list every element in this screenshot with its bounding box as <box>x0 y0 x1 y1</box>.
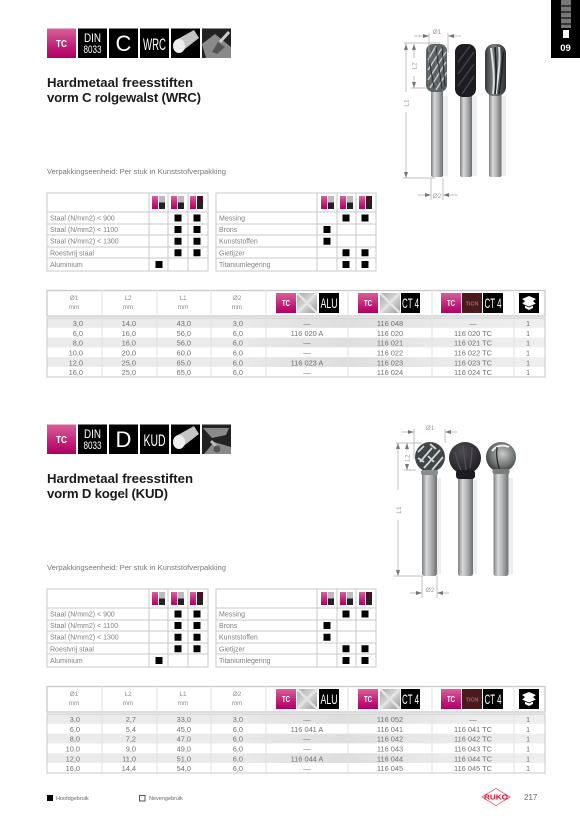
table rows: 6,0 <box>233 764 243 773</box>
column headers: mm <box>123 304 133 311</box>
table rows: 65,0 <box>177 358 191 367</box>
table rows: 16,0 <box>122 339 136 348</box>
section 1 tool photo with dimensions: L1 <box>404 99 410 107</box>
table rows: 116 045 <box>377 764 403 773</box>
section 2 icon row: 8033 <box>84 440 102 452</box>
table rows: — <box>303 735 311 744</box>
table rows: 3,0 <box>233 715 243 724</box>
section 2 icon row: KUD <box>144 431 166 450</box>
table rows: 56,0 <box>177 339 191 348</box>
table rows: 11,0 <box>122 754 136 763</box>
RUKO logo <box>482 788 510 806</box>
column headers: Ø2 <box>233 295 242 302</box>
table rows: 116 043 TC <box>454 745 493 754</box>
table rows: 116 023 TC <box>454 358 493 367</box>
table rows: — <box>303 339 311 348</box>
section 2 icon row: D <box>116 427 131 452</box>
table rows: 60,0 <box>177 349 191 358</box>
table rows: 25,0 <box>122 358 136 367</box>
table rows: 20,0 <box>122 349 136 358</box>
table rows: 116 024 TC <box>454 368 493 377</box>
table rows: 116 048 <box>377 319 403 328</box>
section 2 tool photo with dimensions: L1 <box>396 506 403 514</box>
table rows: 6,0 <box>233 349 243 358</box>
section 1 icon row: C <box>116 31 132 56</box>
table rows: 1 <box>526 319 530 328</box>
section 2 material table right: Kunststoffen <box>219 635 258 642</box>
section 1 icon row: DIN <box>84 31 101 45</box>
table rows: 6,0 <box>73 329 83 338</box>
table rows: 43,0 <box>177 319 191 328</box>
table rows: 65,0 <box>177 368 191 377</box>
table rows: 116 021 <box>377 339 403 348</box>
coating icons: TC <box>282 299 290 308</box>
coating icons: TC <box>447 695 455 704</box>
section 1 material table left: Aluminium <box>50 262 83 269</box>
table rows: 6,0 <box>233 358 243 367</box>
coating icons <box>276 689 503 709</box>
table rows: 1 <box>526 358 530 367</box>
table rows: 6,0 <box>233 745 243 754</box>
table rows: 49,0 <box>177 745 191 754</box>
section 1 icon row: 8033 <box>84 44 102 56</box>
table rows: 12,0 <box>66 754 80 763</box>
section 1 material table right: Brons <box>219 227 238 234</box>
column headers: Ø1 <box>70 295 79 302</box>
section 1 icon row <box>47 28 231 58</box>
material column icons right <box>321 592 372 605</box>
table rows: 47,0 <box>177 735 191 744</box>
coating icons <box>276 293 503 313</box>
table rows: 1 <box>526 764 530 773</box>
coating icons: TiCN <box>466 302 478 308</box>
table rows: 1 <box>526 735 530 744</box>
table rows: 116 042 TC <box>454 735 493 744</box>
table rows: 116 041 A <box>291 725 323 734</box>
section 1 title: vorm C rolgewalst (WRC) <box>47 90 201 105</box>
column headers: Ø2 <box>233 691 242 698</box>
column headers: mm <box>178 700 188 707</box>
table rows: 6,0 <box>70 725 80 734</box>
legend: Hoofdgebruik <box>56 796 89 802</box>
section 2 title: vorm D kogel (KUD) <box>47 486 168 501</box>
coating icons: TC <box>282 695 290 704</box>
column headers: mm <box>232 700 242 707</box>
legend: Nevengebruik <box>149 796 183 802</box>
table rows: 116 022 TC <box>454 349 493 358</box>
section 2 material table left: Aluminium <box>50 658 83 665</box>
material column icons <box>152 592 203 605</box>
table rows: 8,0 <box>73 339 83 348</box>
table rows <box>69 319 530 377</box>
column headers: L1 <box>179 295 187 302</box>
table rows: 116 020 A <box>291 329 323 338</box>
table rows: — <box>303 319 311 328</box>
table rows: 116 020 <box>377 329 403 338</box>
section 1 material table left: Staal (N/mm2) < 900 <box>50 216 115 222</box>
icon: package <box>519 689 539 709</box>
coating icons: CT 4 <box>402 691 419 707</box>
section 2 material table right: Messing <box>219 612 245 618</box>
table rows: 54,0 <box>177 764 191 773</box>
section 2 icon row: DIN <box>84 427 101 441</box>
table rows: 1 <box>526 754 530 763</box>
table rows: 33,0 <box>177 715 191 724</box>
table rows: 116 041 <box>377 725 403 734</box>
coating icons: CT 4 <box>402 295 419 311</box>
table rows: 116 044 TC <box>454 754 493 763</box>
table rows: 45,0 <box>177 725 191 734</box>
section 1 material table right: Kunststoffen <box>219 239 258 246</box>
table rows: 51,0 <box>177 754 191 763</box>
section 1 material table left: Roestvrij staal <box>50 250 94 257</box>
section 1 material table right <box>216 193 376 271</box>
section 1 title <box>47 75 201 105</box>
section 2 title: Hardmetaal freesstiften <box>47 471 193 486</box>
table rows: 116 041 TC <box>454 725 493 734</box>
material column icons <box>152 196 203 209</box>
table rows: 10,0 <box>66 745 80 754</box>
table rows: 7,2 <box>126 735 136 744</box>
table rows: 3,0 <box>73 319 83 328</box>
section 1 tool photo with dimensions: Ø1 <box>433 29 442 36</box>
section 2 material table left: Staal (N/mm2) < 1100 <box>50 623 118 630</box>
section 2 tool photo with dimensions: Ø1 <box>426 425 435 432</box>
table rows: 3,0 <box>70 715 80 724</box>
column headers <box>69 691 242 707</box>
section 1 material table left <box>47 193 208 271</box>
section 1 material table right: Messing <box>219 216 245 222</box>
section 1 tool photo with dimensions: L2 <box>412 62 418 70</box>
table rows: 6,0 <box>233 735 243 744</box>
table rows: 116 024 <box>377 368 403 377</box>
table rows: 1 <box>526 725 530 734</box>
section 1 material table left: Staal (N/mm2) < 1300 <box>50 239 119 246</box>
table rows: — <box>303 745 311 754</box>
coating icons: CT 4 <box>484 691 502 707</box>
section 1 icon row: WRC <box>143 35 166 54</box>
column headers: mm <box>178 304 188 311</box>
chapter tab 09 <box>551 0 580 58</box>
section 2 icon row <box>47 424 231 454</box>
table rows: 14,4 <box>122 764 136 773</box>
section 2 packaging note: Verpakkingseenheid: Per stuk in Kunststofverpakking <box>47 563 226 572</box>
table rows: — <box>303 349 311 358</box>
section 2 material table left: Roestvrij staal <box>50 646 94 653</box>
table rows: 10,0 <box>69 349 83 358</box>
table rows: 1 <box>526 329 530 338</box>
section 2 material table right: Brons <box>219 623 238 630</box>
coating icons: TC <box>364 299 372 308</box>
section 2 article table <box>47 686 545 773</box>
table rows: 16,0 <box>66 764 80 773</box>
coating icons: TC <box>447 299 455 308</box>
chapter tab 09: 09 <box>560 43 571 54</box>
section 2 material table right <box>216 589 376 667</box>
table rows <box>66 715 530 773</box>
table rows: 1 <box>526 349 530 358</box>
table rows: 14,0 <box>122 319 136 328</box>
section 2 material table right: Gietijzer <box>219 646 245 653</box>
table rows: 16,0 <box>122 329 136 338</box>
section 1 material table right: Gietijzer <box>219 250 245 257</box>
table rows: — <box>303 715 311 724</box>
table rows: 6,0 <box>233 725 243 734</box>
table rows: 116 045 TC <box>454 764 493 773</box>
column headers: mm <box>69 700 79 707</box>
RUKO logo: RUKO <box>484 792 508 802</box>
table rows: — <box>469 319 477 328</box>
table rows: 6,0 <box>233 368 243 377</box>
page number: 217 <box>524 793 538 802</box>
section 2 tool photo with dimensions: L2 <box>404 454 412 462</box>
column headers: Ø1 <box>70 691 79 698</box>
icon: package <box>519 293 539 313</box>
coating icons: ALU <box>320 295 338 311</box>
table rows: 1 <box>526 368 530 377</box>
section 2 material table left: Staal (N/mm2) < 1300 <box>50 635 119 642</box>
section 2 icon row: TC <box>56 435 67 446</box>
table rows: 6,0 <box>233 754 243 763</box>
section 2 tool photo with dimensions: Ø2 <box>426 587 435 594</box>
table rows: 116 023 <box>377 358 403 367</box>
table rows: 6,0 <box>233 339 243 348</box>
table rows: 116 023 A <box>291 358 323 367</box>
table rows: — <box>469 715 477 724</box>
section 1 tool photo with dimensions <box>403 29 506 200</box>
material column icons right <box>321 196 372 209</box>
coating icons: ALU <box>320 691 338 707</box>
column headers: L2 <box>124 295 132 302</box>
coating icons: TC <box>364 695 372 704</box>
section 1 packaging note: Verpakkingseenheid: Per stuk in Kunststofverpakking <box>47 167 226 176</box>
column headers <box>69 295 242 311</box>
table rows: — <box>303 368 311 377</box>
table rows: 9,0 <box>126 745 136 754</box>
table rows: 116 044 A <box>291 754 323 763</box>
table rows: 6,0 <box>233 329 243 338</box>
table rows: 16,0 <box>69 368 83 377</box>
section 1 material table left: Staal (N/mm2) < 1100 <box>50 227 118 234</box>
table rows: 116 022 <box>377 349 403 358</box>
section 2 material table left: Staal (N/mm2) < 900 <box>50 612 115 618</box>
column headers: L2 <box>124 691 132 698</box>
table rows: 2,7 <box>126 715 136 724</box>
table rows: 116 021 TC <box>454 339 493 348</box>
section 2 title <box>47 471 193 501</box>
section 2 material table left <box>47 589 208 667</box>
section 2 tool photo with dimensions <box>394 425 516 598</box>
section 1 material table right: Titaniumlegering <box>219 262 271 269</box>
coating icons: TiCN <box>466 698 478 704</box>
column headers: mm <box>232 304 242 311</box>
table rows: 3,0 <box>233 319 243 328</box>
section 1 tool photo with dimensions: Ø2 <box>433 193 442 200</box>
column headers: L1 <box>179 691 187 698</box>
section 1 article table <box>47 290 545 377</box>
coating icons: CT 4 <box>484 295 502 311</box>
section 2 material table right: Titaniumlegering <box>219 658 271 665</box>
table rows: 12,0 <box>69 358 83 367</box>
table rows: 5,4 <box>126 725 136 734</box>
table rows: 25,0 <box>122 368 136 377</box>
table rows: 116 052 <box>377 715 403 724</box>
table rows: 116 042 <box>377 735 403 744</box>
table rows: 1 <box>526 745 530 754</box>
table rows: 1 <box>526 715 530 724</box>
table rows: 116 043 <box>377 745 403 754</box>
column headers: mm <box>69 304 79 311</box>
table rows: 116 044 <box>377 754 403 763</box>
section 1 title: Hardmetaal freesstiften <box>47 75 193 90</box>
table rows: 56,0 <box>177 329 191 338</box>
table rows: 8,0 <box>70 735 80 744</box>
legend <box>47 795 183 802</box>
section 1 icon row: TC <box>56 39 67 50</box>
column headers: mm <box>123 700 133 707</box>
table rows: — <box>303 764 311 773</box>
table rows: 116 020 TC <box>454 329 493 338</box>
table rows: 1 <box>526 339 530 348</box>
